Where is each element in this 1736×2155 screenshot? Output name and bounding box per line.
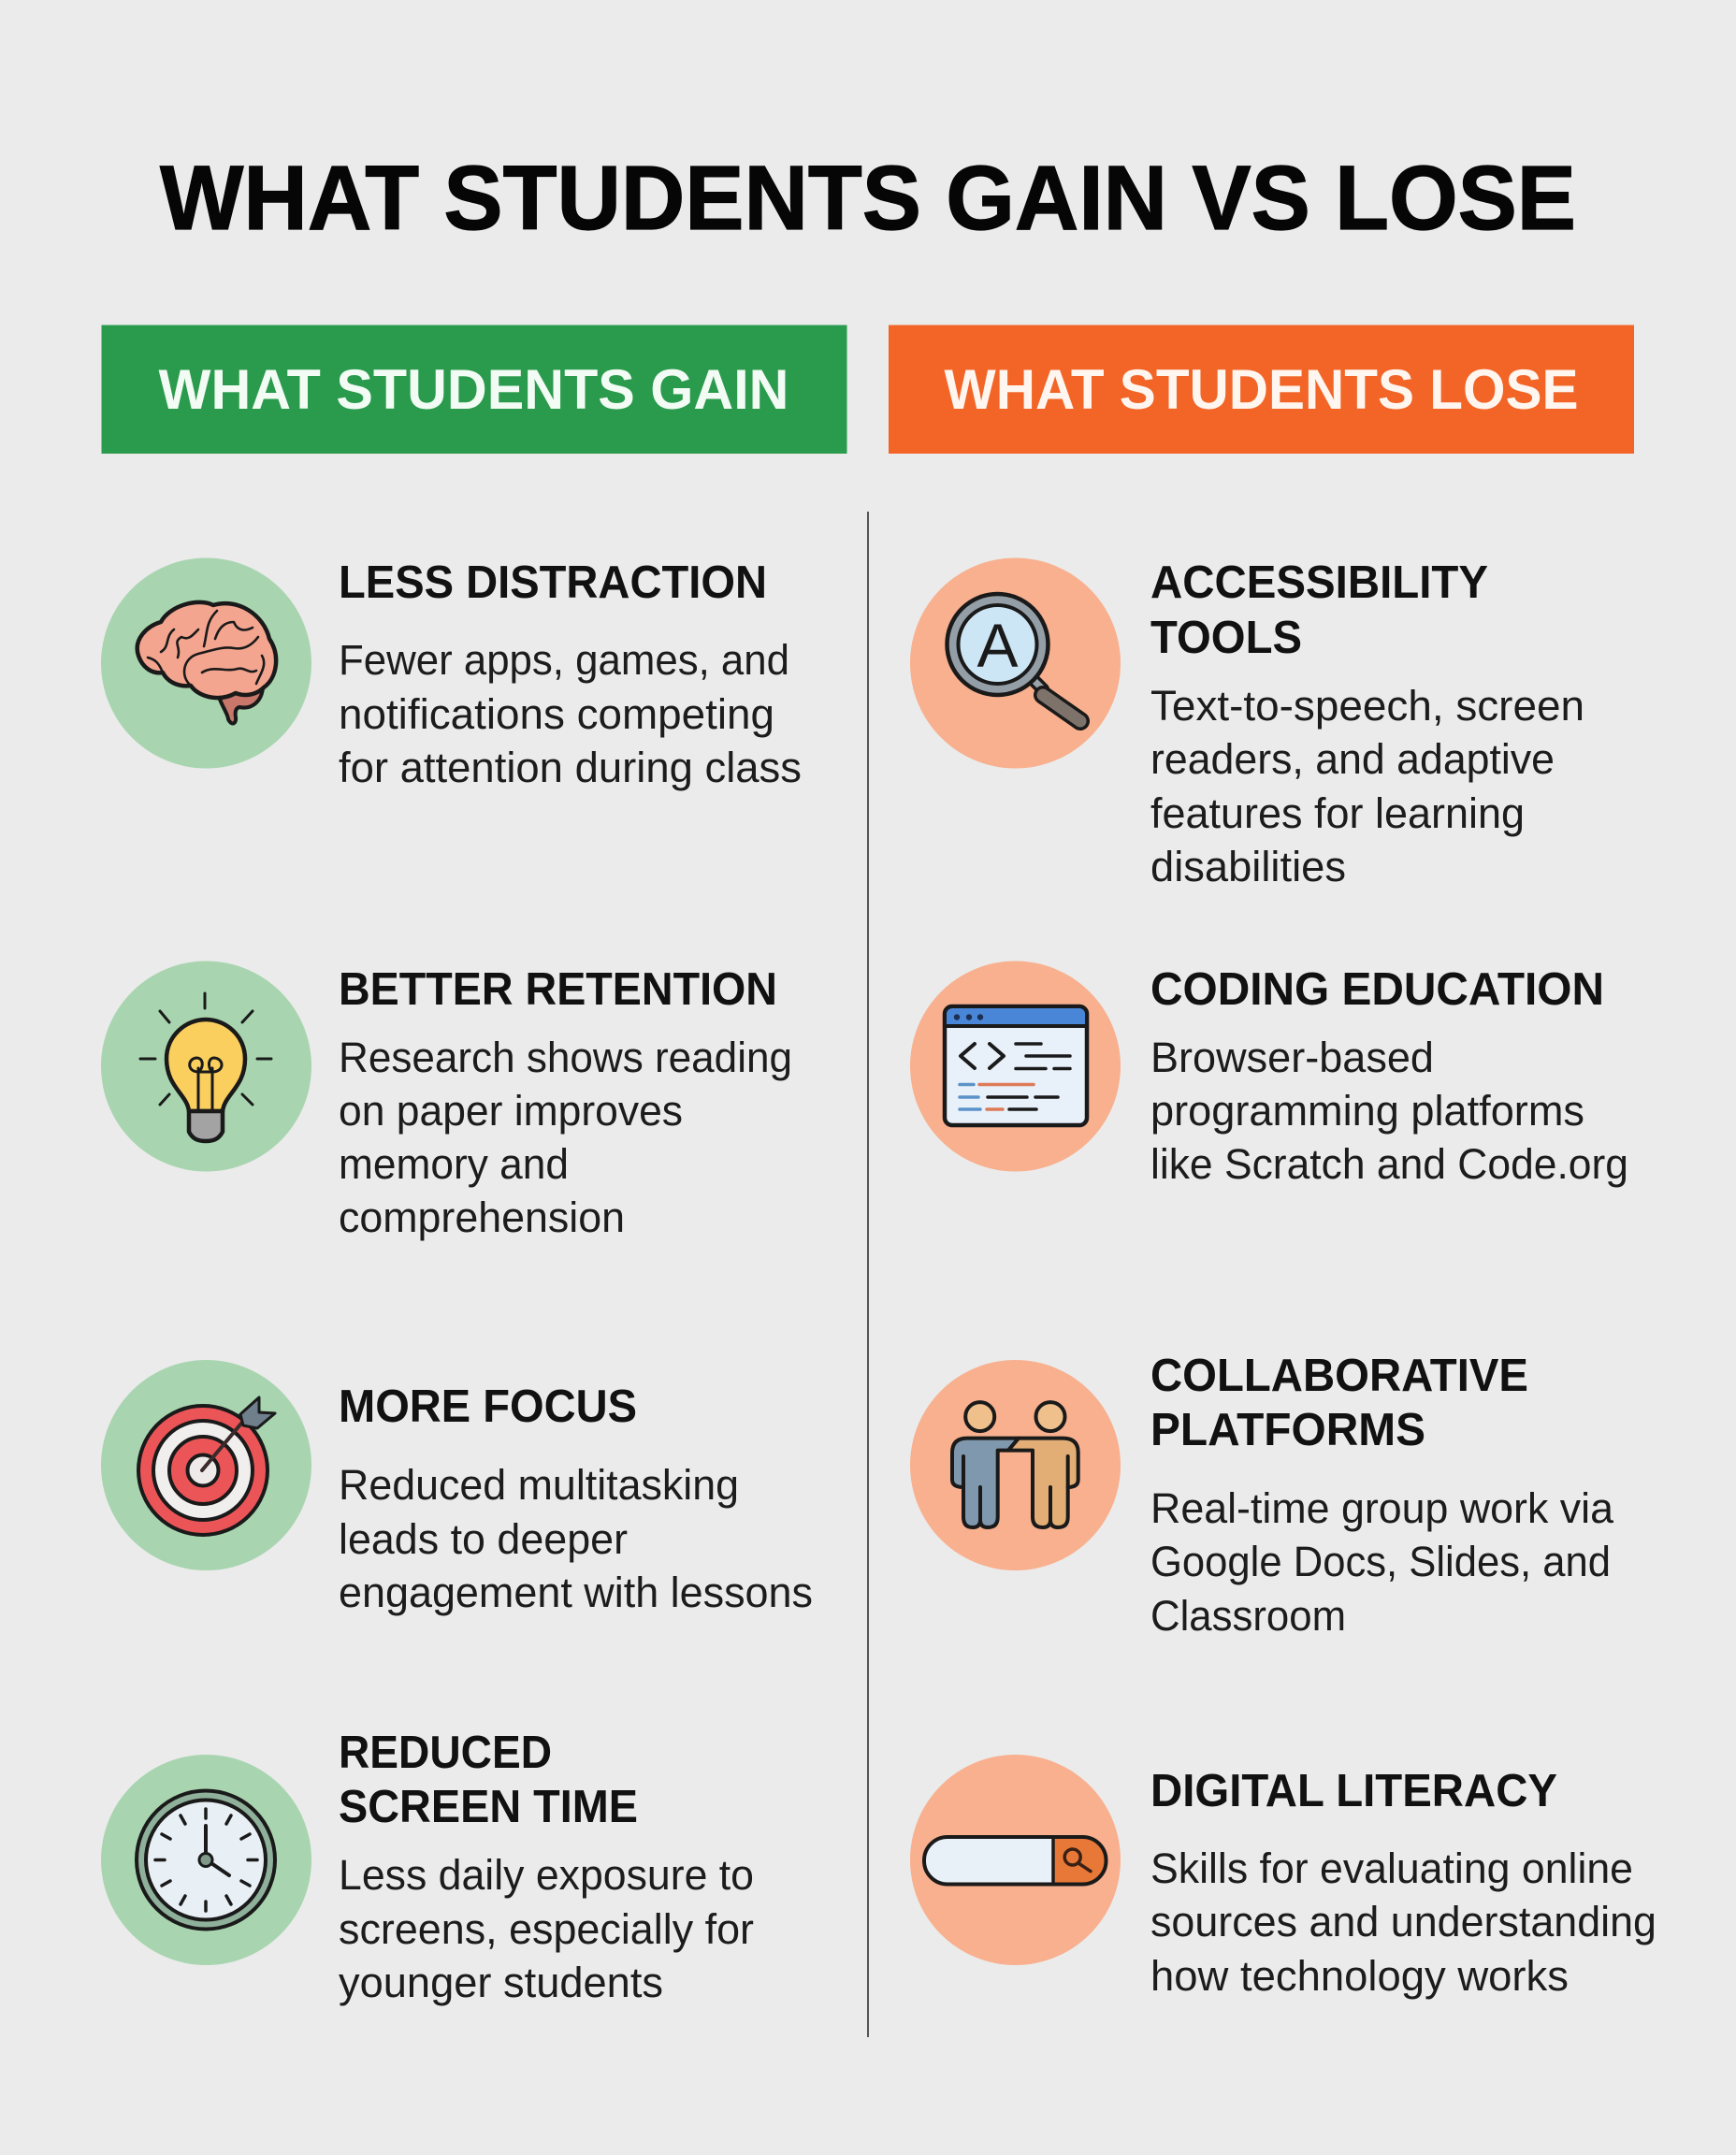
banner: what students lose — [889, 325, 1634, 454]
description: engagement with lessons — [339, 1569, 813, 1616]
icon: brain — [101, 557, 311, 769]
description: Classroom — [1150, 1592, 1346, 1640]
description — [1150, 1844, 1656, 2000]
heading: SCREEN TIME — [339, 1782, 638, 1832]
description: for attention during class — [339, 744, 802, 791]
icon: two people — [910, 1360, 1121, 1570]
description: on paper improves — [339, 1087, 683, 1135]
title: WHAT STUDENTS GAIN VS LOSE — [160, 147, 1576, 249]
item: better retention — [101, 962, 792, 1241]
icon: magnifier with letter A — [910, 557, 1121, 769]
icon: light bulb — [101, 962, 311, 1171]
heading: DIGITAL LITERACY — [1150, 1766, 1557, 1816]
item: accessibility tools — [910, 557, 1584, 890]
heading: CODING EDUCATION — [1150, 964, 1604, 1015]
item: digital literacy — [910, 1755, 1656, 2000]
description — [339, 1461, 813, 1616]
heading: BETTER RETENTION — [339, 964, 777, 1015]
heading — [339, 1728, 638, 1832]
description: like Scratch and Code.org — [1150, 1140, 1628, 1188]
banner: what students gain — [101, 325, 847, 454]
banner: what students gain: WHAT STUDENTS GAIN — [159, 358, 789, 421]
heading: REDUCED — [339, 1728, 552, 1778]
heading: PLATFORMS — [1150, 1405, 1425, 1455]
description — [1150, 1034, 1628, 1188]
description: younger students — [339, 1959, 663, 2006]
description: Less daily exposure to — [339, 1851, 754, 1899]
description: Google Docs, Slides, and — [1150, 1538, 1611, 1585]
description: notifications competing — [339, 690, 774, 738]
heading: TOOLS — [1150, 613, 1302, 663]
description: Browser-based — [1150, 1034, 1434, 1081]
description: Research shows reading — [339, 1034, 792, 1081]
description: disabilities — [1150, 843, 1346, 890]
description: programming platforms — [1150, 1087, 1584, 1135]
description: Text-to-speech, screen — [1150, 682, 1584, 730]
icon: target with arrow — [101, 1360, 311, 1570]
description: readers, and adaptive — [1150, 735, 1555, 783]
heading — [1150, 1351, 1528, 1455]
icon: magnifier with letter A: A — [976, 611, 1019, 680]
item: coding education — [910, 962, 1628, 1188]
heading: MORE FOCUS — [339, 1381, 637, 1432]
description: Real-time group work via — [1150, 1484, 1614, 1532]
item: reduced screen time — [101, 1728, 754, 2006]
banner: what students lose: WHAT STUDENTS LOSE — [945, 358, 1579, 421]
heading: ACCESSIBILITY — [1150, 557, 1488, 608]
item: less distraction — [101, 557, 802, 791]
item: more focus — [101, 1360, 813, 1616]
heading: COLLABORATIVE — [1150, 1351, 1528, 1401]
heading: LESS DISTRACTION — [339, 557, 767, 608]
description: memory and — [339, 1140, 569, 1188]
description — [339, 1851, 754, 2006]
description: sources and understanding — [1150, 1898, 1656, 1945]
description: comprehension — [339, 1193, 625, 1241]
icon: search bar — [910, 1755, 1121, 1965]
description — [339, 636, 802, 791]
description — [1150, 1484, 1614, 1640]
icon: code window — [910, 962, 1121, 1171]
description: Skills for evaluating online — [1150, 1844, 1633, 1892]
description: how technology works — [1150, 1952, 1569, 2000]
description: screens, especially for — [339, 1905, 754, 1953]
description: Reduced multitasking — [339, 1461, 739, 1509]
description — [1150, 682, 1584, 890]
description — [339, 1034, 792, 1241]
description: leads to deeper — [339, 1515, 628, 1563]
description: features for learning — [1150, 789, 1525, 837]
icon: clock — [101, 1755, 311, 1965]
description: Fewer apps, games, and — [339, 636, 789, 684]
heading — [1150, 557, 1488, 663]
item: collaborative platforms — [910, 1351, 1614, 1640]
